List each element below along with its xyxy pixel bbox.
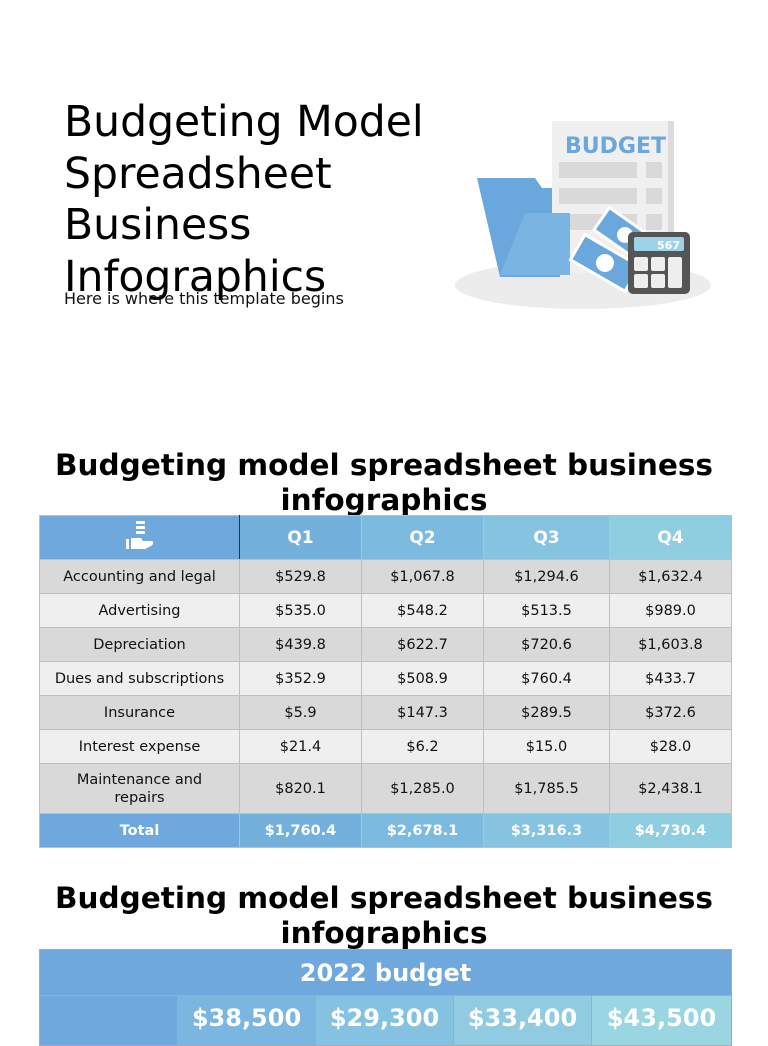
- table: 2022 budget: 2022 budget: [300, 958, 471, 986]
- table: 2022 budget: $29,300: [330, 1004, 439, 1032]
- table: quarterly budget: $15.0: [526, 738, 567, 754]
- table: quarterly budget: $3,316.3: [511, 822, 582, 838]
- title: Spreadsheet: [64, 150, 332, 198]
- table: quarterly budget: Advertising: [98, 602, 181, 618]
- table: quarterly budget: $1,294.6: [514, 568, 579, 584]
- title: Infographics: [64, 252, 326, 302]
- heading: section 2: [55, 881, 713, 950]
- table: quarterly budget: $21.4: [280, 738, 321, 754]
- table: 2022 budget: $43,500: [607, 1004, 716, 1032]
- heading: section 2: Budgeting model spreadsheet business: [55, 881, 713, 915]
- table: quarterly budget: $6.2: [406, 738, 439, 754]
- table: quarterly budget: $535.0: [275, 602, 326, 618]
- heading: section 1: infographics: [280, 483, 488, 517]
- table: quarterly budget: $5.9: [284, 704, 317, 720]
- heading: section 1: Budgeting model spreadsheet business: [55, 448, 713, 482]
- table: quarterly budget: $439.8: [275, 636, 326, 652]
- table: 2022 budget: $33,400: [468, 1004, 577, 1032]
- heading: section 1: [55, 448, 713, 517]
- table: quarterly budget: $508.9: [397, 670, 448, 686]
- table: quarterly budget: $720.6: [521, 636, 572, 652]
- table: quarterly budget: $372.6: [645, 704, 696, 720]
- table: quarterly budget: $4,730.4: [635, 822, 706, 838]
- table: quarterly budget: $289.5: [521, 704, 572, 720]
- table: 2022 budget: $38,500: [192, 1004, 301, 1032]
- table: quarterly budget: $989.0: [645, 602, 696, 618]
- illustration: budget: BUDGET: [565, 134, 666, 159]
- table: quarterly budget: [39, 515, 732, 848]
- table: quarterly budget: Q2: [409, 528, 436, 548]
- table: quarterly budget: $147.3: [397, 704, 448, 720]
- table: quarterly budget: $820.1: [275, 780, 326, 796]
- table: quarterly budget: $1,067.8: [390, 568, 455, 584]
- title: Business: [64, 201, 251, 250]
- illustration: budget: 567: [657, 239, 680, 252]
- table: quarterly budget: $352.9: [275, 670, 326, 686]
- table: quarterly budget: Total: [120, 822, 159, 838]
- table: quarterly budget: Q1: [287, 528, 314, 548]
- table: quarterly budget: $28.0: [650, 738, 691, 754]
- table: quarterly budget: Dues and subscriptions: [55, 670, 224, 686]
- table: quarterly budget: $529.8: [275, 568, 326, 584]
- table: quarterly budget: $513.5: [521, 602, 572, 618]
- table: quarterly budget: Maintenance and: [77, 772, 202, 788]
- table: quarterly budget: $2,438.1: [638, 780, 703, 796]
- table: quarterly budget: $433.7: [645, 670, 696, 686]
- table: quarterly budget: $1,760.4: [265, 822, 336, 838]
- table: quarterly budget: Interest expense: [79, 738, 200, 754]
- table: quarterly budget: $622.7: [397, 636, 448, 652]
- table: quarterly budget: Q4: [657, 528, 684, 548]
- title: Budgeting Model: [64, 98, 424, 147]
- table: quarterly budget: Accounting and legal: [63, 568, 216, 584]
- table: quarterly budget: Depreciation: [93, 636, 186, 652]
- table: quarterly budget: $548.2: [397, 602, 448, 618]
- table: quarterly budget: $1,785.5: [514, 780, 579, 796]
- table: quarterly budget: $1,632.4: [638, 568, 703, 584]
- heading: section 2: infographics: [280, 916, 488, 950]
- table: 2022 budget: [39, 949, 732, 1046]
- title: [64, 98, 424, 302]
- table: quarterly budget: repairs: [114, 790, 165, 806]
- illustration: budget: [455, 121, 711, 309]
- table: quarterly budget: $760.4: [521, 670, 572, 686]
- table: quarterly budget: $1,285.0: [390, 780, 455, 796]
- subtitle: Here is where this template begins: [64, 289, 344, 308]
- table: quarterly budget: $1,603.8: [638, 636, 703, 652]
- table: quarterly budget: $2,678.1: [387, 822, 458, 838]
- table: quarterly budget: Insurance: [104, 704, 175, 720]
- table: quarterly budget: Q3: [533, 528, 560, 548]
